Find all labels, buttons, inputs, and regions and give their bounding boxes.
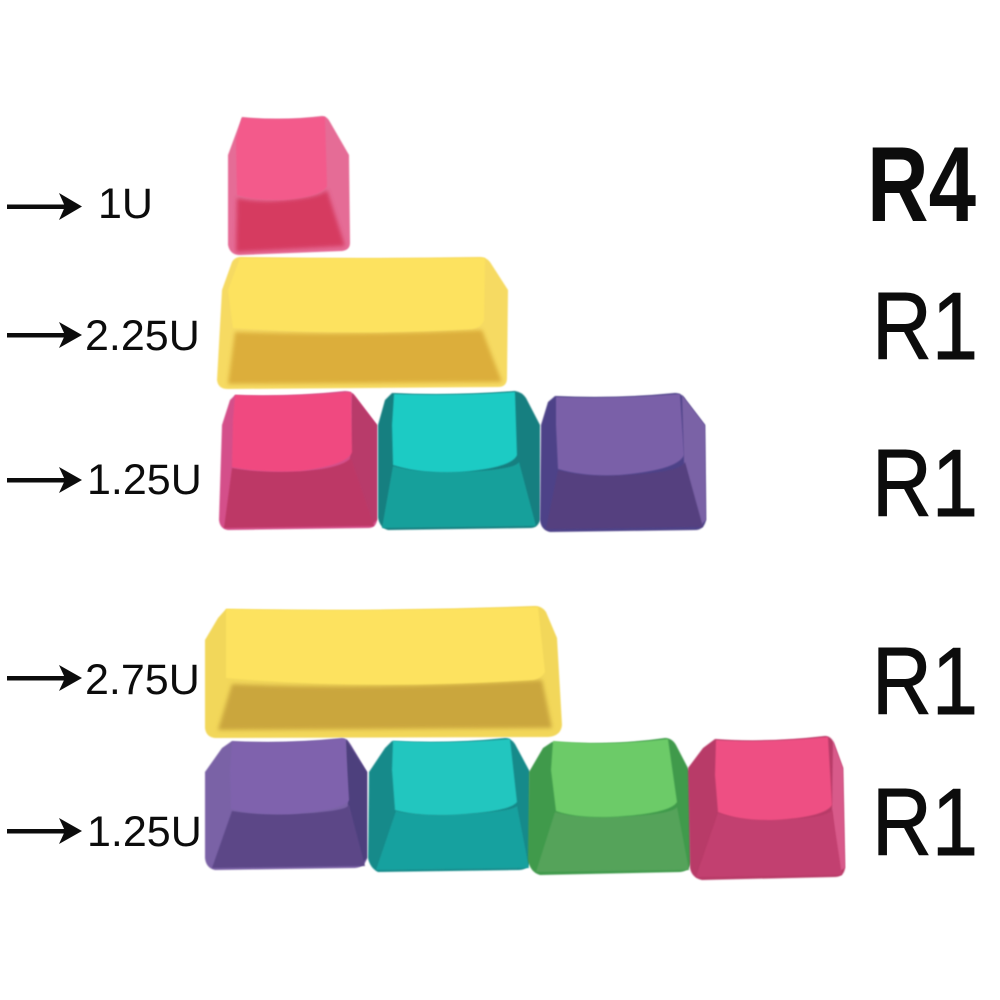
arrow: 2.25U (7, 322, 82, 348)
keycap: 1.25U pink bottom row (688, 736, 845, 880)
keycap: 1.25U pink (219, 391, 377, 530)
keycap: 1.25U teal bottom row (368, 738, 530, 872)
label: 2.75U: 2.75U (85, 656, 200, 704)
arrow: 2.75U (7, 665, 82, 691)
row label: R1 row 3: R1 (872, 430, 978, 537)
label: 1.25U lower: 1.25U (87, 808, 202, 856)
keycap: 2.25U yellow (217, 257, 508, 389)
keycap: 1.25U purple (540, 393, 706, 532)
keycap: 1.25U purple bottom row (205, 738, 367, 870)
row label: R1 row 2: R1 (872, 273, 978, 380)
label: 1U: 1U (98, 180, 153, 228)
keycap: 2.75U yellow (205, 606, 562, 738)
row label: R1 row 4: R1 (872, 628, 978, 735)
arrow: 1U (7, 193, 82, 220)
keycap: 1.25U teal (378, 391, 540, 530)
keycap: 1.25U green bottom row (528, 738, 691, 875)
row label: R4: R4 (867, 124, 976, 244)
label: 2.25U: 2.25U (85, 312, 200, 360)
arrow: 1.25U lower (7, 818, 82, 844)
label: 1.25U upper: 1.25U (87, 456, 202, 504)
arrow: 1.25U upper (7, 467, 82, 493)
row label: R1 row 5: R1 (872, 769, 978, 876)
keycap: 1U pink R4 (228, 116, 350, 255)
